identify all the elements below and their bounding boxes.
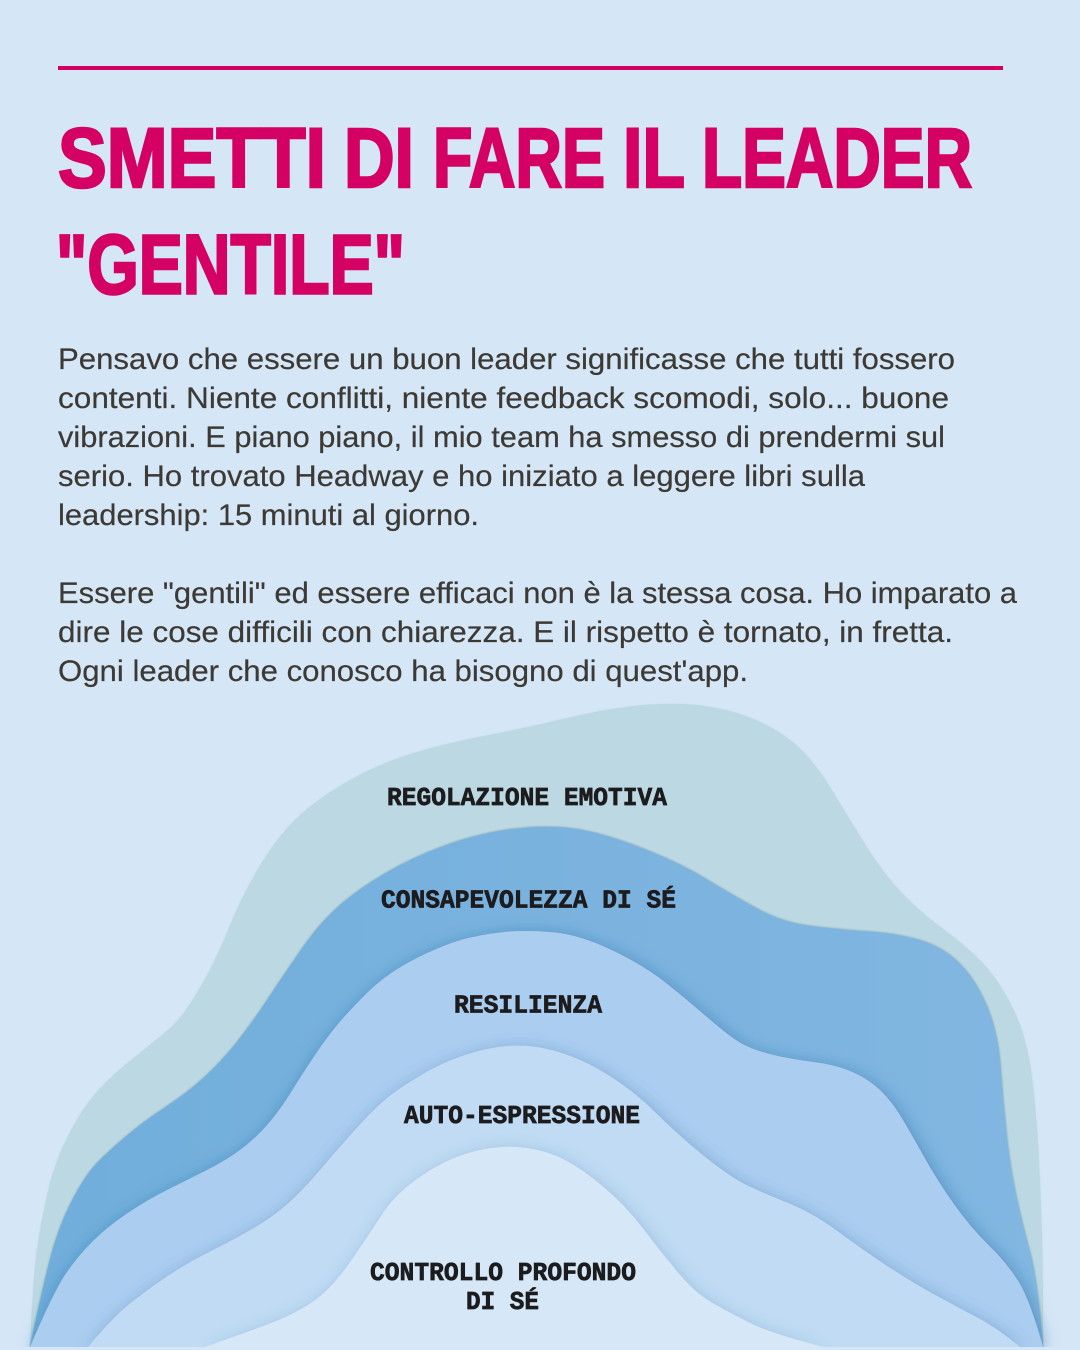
intro paragraph	[58, 343, 955, 532]
title: LEADER	[702, 111, 972, 205]
title	[56, 111, 972, 312]
intro paragraph: serio. Ho trovato Headway e ho iniziato a leggere libri sulla	[58, 460, 865, 493]
title: IL	[623, 111, 685, 205]
title: "GENTILE"	[56, 218, 405, 312]
layer: regolazione emotiva: REGOLAZIONE EMOTIVA	[387, 783, 667, 813]
second paragraph: Ogni leader che conosco ha bisogno di quest'app.	[58, 655, 748, 688]
layer: auto-espressione	[88, 1046, 1020, 1347]
layer: resilienza: RESILIENZA	[454, 990, 602, 1020]
intro paragraph: contenti. Niente conflitti, niente feedback scomodi, solo... buone	[58, 382, 949, 415]
second paragraph	[58, 577, 1017, 688]
layered paper hill diagram	[30, 704, 1043, 1347]
top accent rule	[58, 66, 1003, 70]
second paragraph: dire le cose difficili con chiarezza. E il rispetto è tornato, in fretta.	[58, 616, 953, 649]
second paragraph: Essere "gentili" ed essere efficaci non è la stessa cosa. Ho imparato a	[58, 577, 1017, 610]
intro paragraph: Pensavo che essere un buon leader significasse che tutti fossero	[58, 343, 955, 376]
title: SMETTI	[58, 111, 326, 205]
title: DI	[344, 111, 414, 205]
layer: controllo profondo di sé: DI SÉ	[466, 1287, 539, 1317]
title: FARE	[433, 111, 605, 205]
layer: controllo profondo di sé: CONTROLLO PROFONDO	[370, 1258, 636, 1288]
layer: auto-espressione: AUTO-ESPRESSIONE	[404, 1101, 640, 1131]
intro paragraph: vibrazioni. E piano piano, il mio team ha smesso di prendermi sul	[58, 421, 945, 454]
layer: resilienza	[30, 931, 1043, 1347]
intro paragraph: leadership: 15 minuti al giorno.	[58, 499, 479, 532]
layer: controllo profondo di sé	[205, 1147, 823, 1347]
layer: consapevolezza di sé: CONSAPEVOLEZZA DI SÉ	[381, 886, 676, 916]
